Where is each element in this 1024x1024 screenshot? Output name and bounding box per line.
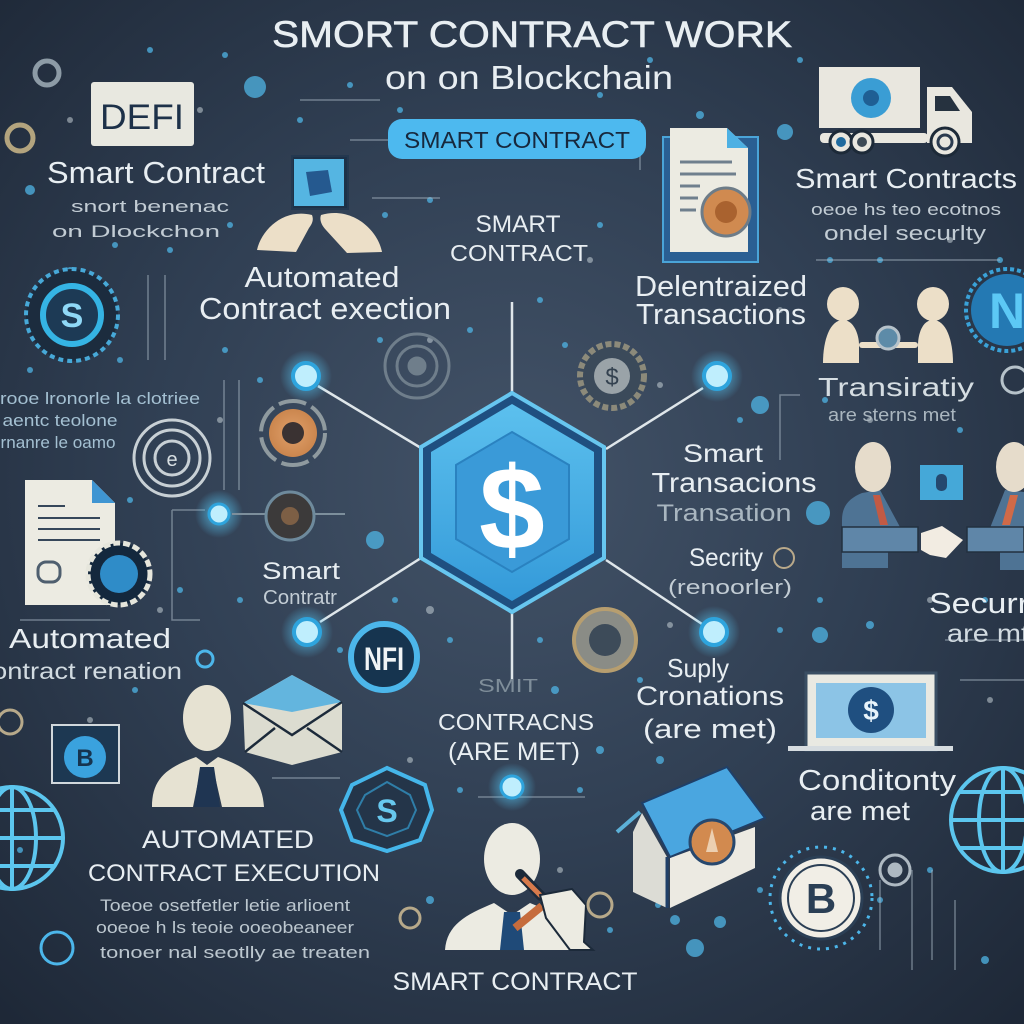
icon: token coin right of top line	[580, 344, 644, 408]
text block: smart transactions right	[652, 440, 816, 599]
text block: automated contract execution bottom: tonoer nal seotlly ae treaten	[100, 943, 370, 962]
title: SMORT CONTRACT WORK	[272, 14, 792, 55]
text block: left paragraph: rooe lronorle la clotriee	[0, 389, 200, 408]
icon: square token: B	[76, 745, 94, 772]
text block: automated contract execution bottom: ooeoe h ls teoie ooeobeaneer	[96, 918, 354, 937]
text block: decentralized transactions: Transactions	[636, 299, 806, 331]
icon: house envelope	[617, 767, 765, 908]
text block: supply conditions: Suply	[667, 653, 729, 683]
text block: securr are me right: are mt	[947, 620, 1024, 648]
text block: smart contract top-left	[47, 155, 265, 241]
badge: smart contract: SMART CONTRACT	[404, 127, 630, 153]
central hexagon with dollar: $	[479, 443, 545, 575]
text block: conditions are met: are met	[810, 796, 911, 826]
icon: person signing	[445, 823, 593, 950]
icon: dark orange coin	[232, 492, 345, 540]
icon: dollar ring left	[26, 269, 118, 361]
text block: automated contract execution	[199, 262, 451, 326]
badge: smart contract	[388, 119, 646, 159]
text block: smart contract top-left: snort benenac	[71, 197, 230, 216]
icon: NFT token: NFI	[364, 641, 404, 677]
text block: automated contract execution bottom: Toeoe osetfetler letie arlioent	[100, 896, 350, 915]
text block: smart contracts top-right	[795, 163, 1017, 245]
text block: supply conditions: Cronations	[636, 681, 784, 711]
text block: automated contract execution: Contract exection	[199, 291, 451, 326]
icon: businessman with tie	[152, 685, 264, 807]
glowing network nodes	[195, 350, 743, 811]
text block: automated contract execution bottom: AUTOMATED	[142, 826, 314, 854]
icon: bitcoin coin: B	[806, 875, 836, 922]
text block: smart transactions right: Smart	[683, 440, 763, 468]
icon: DEFI card	[91, 82, 194, 146]
icon: banknote: $	[863, 695, 879, 726]
text block: contracns are met: CONTRACNS	[438, 709, 594, 735]
text block: automated contract execution bottom	[88, 826, 380, 962]
text block: smart transactions right: (renoorler)	[668, 577, 792, 599]
icon: DEFI card: DEFI	[100, 98, 184, 137]
text block: automated contract execution: Automated	[244, 262, 400, 294]
title	[272, 14, 792, 96]
text block: decentralized transactions: Delentraized	[635, 271, 807, 303]
text block: transparency	[818, 372, 974, 425]
text block: smart transactions right: Secrity	[689, 544, 763, 572]
icon: document with gear	[25, 480, 150, 605]
icon: concentric coin	[134, 420, 210, 496]
icon: banknote	[788, 673, 953, 751]
central hexagon with dollar	[421, 393, 604, 612]
icon: businessmen handshake	[842, 442, 1024, 570]
text block: smart contracts top-right: Smart Contracts	[795, 163, 1017, 194]
text block: contracns are met	[438, 676, 594, 766]
icon: small token right	[880, 855, 910, 885]
icon: hexagon token	[341, 768, 432, 851]
icon: square token	[52, 725, 119, 783]
icon: N token right edge: N	[989, 283, 1024, 339]
text block: left paragraph	[0, 389, 200, 452]
text block: smart contract top-center: SMART	[476, 211, 561, 238]
text block: smart transactions right: Transation	[656, 500, 792, 527]
text block: smart contracts top-right: ondel securlty	[824, 223, 986, 245]
icon: document with seal	[663, 128, 758, 262]
icon: hands holding tablet	[257, 156, 382, 253]
text block: conditions are met: Conditonty	[798, 765, 957, 797]
text block: smart contracts top-right: oeoe hs teo ecotnos	[811, 200, 1001, 219]
text block: decentralized transactions	[635, 271, 807, 331]
icon: NFT token	[351, 624, 417, 690]
text block: transparency: Transiratiy	[818, 372, 974, 402]
text block: contracns are met: (ARE MET)	[448, 738, 580, 766]
icon: hexagon token: S	[376, 793, 398, 829]
text block: left paragraph: aentc teolone	[2, 411, 118, 430]
text block: smart contrat left	[262, 558, 340, 609]
icon: bitcoin coin	[770, 847, 872, 949]
text block: smart contract top-left: Smart Contract	[47, 155, 265, 190]
text block: smart contract top-left: on Dlockchon	[52, 222, 220, 241]
icon: concentric coin: e	[166, 449, 178, 471]
icon: ring top-left	[7, 61, 59, 151]
text block: automated contract execution bottom: CONTRACT EXECUTION	[88, 860, 380, 887]
text block: smart transactions right: Transacions	[652, 467, 816, 498]
text block: smart contrat left: Contratr	[263, 587, 337, 609]
icon: envelope	[243, 675, 342, 765]
text block: securr are me right	[929, 588, 1024, 648]
central hexagon connector lines	[318, 302, 703, 680]
icon: coin lower right of hexagon	[574, 609, 636, 671]
text block: automated contract renation: Automated	[9, 623, 171, 654]
text block: transparency: are sterns met	[828, 405, 956, 425]
icon: two people shaking hands	[823, 287, 953, 363]
icon: small bottom tokens	[0, 367, 1024, 964]
text block: contracns are met: SMIT	[478, 676, 538, 696]
text block: securr are me right: Securr	[929, 588, 1024, 620]
title: on on Blockchain	[385, 59, 673, 96]
text block: supply conditions: (are met)	[643, 714, 777, 744]
text block: left paragraph: rnanre le oamo	[0, 433, 116, 452]
icon: globe right	[951, 768, 1024, 872]
text block: supply conditions	[636, 653, 784, 744]
text block: smart contract top-center: CONTRACT	[450, 240, 588, 266]
text block: smart contract top-center	[450, 211, 588, 266]
icon: target rings center-left	[385, 334, 449, 398]
text block: bottom smart contract: SMART CONTRACT	[392, 968, 638, 996]
icon: token coin right of top line: $	[605, 364, 619, 391]
icon: dollar ring left: S	[61, 297, 83, 335]
icon: globe left	[0, 787, 63, 889]
text block: smart contrat left: Smart	[262, 558, 340, 585]
icon: orange lock coin	[261, 401, 325, 465]
text block: automated contract renation	[0, 623, 182, 684]
text block: conditions are met	[798, 765, 957, 826]
icon: N token right edge	[966, 269, 1024, 351]
icon: delivery truck	[819, 67, 972, 156]
